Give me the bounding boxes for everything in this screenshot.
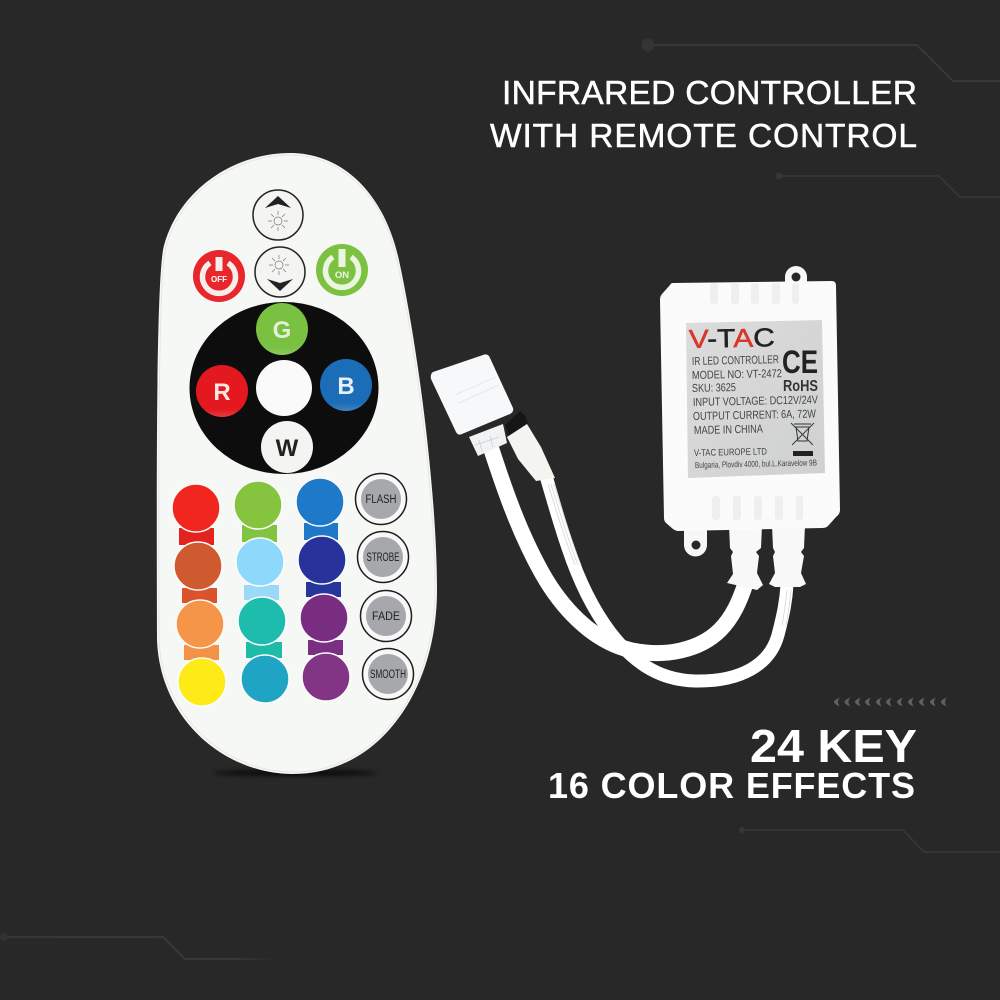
spec text: Bulgaria, Plovdiv 4000, bul.L.Karavelow 9B (695, 457, 817, 470)
button: on: ON (335, 270, 349, 281)
spec text: MODEL NO: VT-2472 (692, 368, 782, 382)
button: on (316, 244, 368, 296)
button: brightness up (253, 190, 303, 240)
button: off: OFF (211, 275, 227, 284)
heading: 24 key 16 color effects (548, 720, 917, 806)
button: W: W (276, 435, 299, 462)
dc jack (505, 411, 555, 481)
icon: crossed-out bin (791, 423, 814, 456)
cables (490, 445, 791, 681)
spec text: INPUT VOLTAGE: DC12V/24V (693, 394, 818, 409)
spec text: V-TAC EUROPE LTD (694, 446, 767, 459)
icon: chevron row (834, 698, 947, 706)
button: fade (360, 590, 412, 642)
button: R: R (213, 379, 231, 406)
controller box (660, 266, 840, 590)
button: flash: FLASH (366, 494, 396, 506)
spec text: IR LED CONTROLLER (692, 354, 779, 368)
button: B: B (337, 373, 355, 400)
button: G: G (273, 317, 291, 344)
button: G (256, 303, 308, 355)
product label (686, 320, 825, 478)
spec text (692, 354, 818, 470)
spec text: MADE IN CHINA (694, 424, 763, 437)
spec text: SKU: 3625 (692, 382, 736, 395)
button: B (320, 359, 372, 411)
button: strobe (358, 532, 408, 582)
vents (710, 283, 803, 520)
title: infrared controller with remote control: WITH REMOTE CONTROL (490, 118, 917, 155)
strain reliefs (727, 525, 806, 590)
heading: 24 key 16 color effects: 24 KEY (750, 720, 917, 772)
mark: RoHS: RoHS (783, 378, 818, 395)
button: W (261, 421, 313, 473)
button: brightness down (255, 247, 305, 297)
button: fade: FADE (372, 611, 400, 623)
spec text: OUTPUT CURRENT: 6A, 72W (693, 408, 816, 423)
mounting tabs (684, 266, 807, 556)
connector plug (431, 354, 513, 456)
button: smooth (362, 648, 414, 700)
button: smooth: SMOOTH (370, 669, 406, 681)
title: infrared controller with remote control: INFRARED CONTROLLER (502, 75, 917, 112)
rgb control disc (190, 302, 378, 474)
title: infrared controller with remote control (490, 75, 917, 155)
heading: 24 key 16 color effects: 16 COLOR EFFECTS (548, 765, 915, 806)
button: strobe: STROBE (366, 552, 400, 564)
mark: CE: CE (782, 344, 818, 380)
button: R (196, 365, 248, 417)
colour key connectors (179, 523, 343, 660)
logo: v-tac: V-TAC (688, 322, 775, 354)
colour keys (172, 478, 350, 706)
button: off (193, 250, 245, 302)
button: flash (356, 474, 406, 524)
remote control (157, 153, 437, 776)
effect buttons (356, 474, 414, 700)
